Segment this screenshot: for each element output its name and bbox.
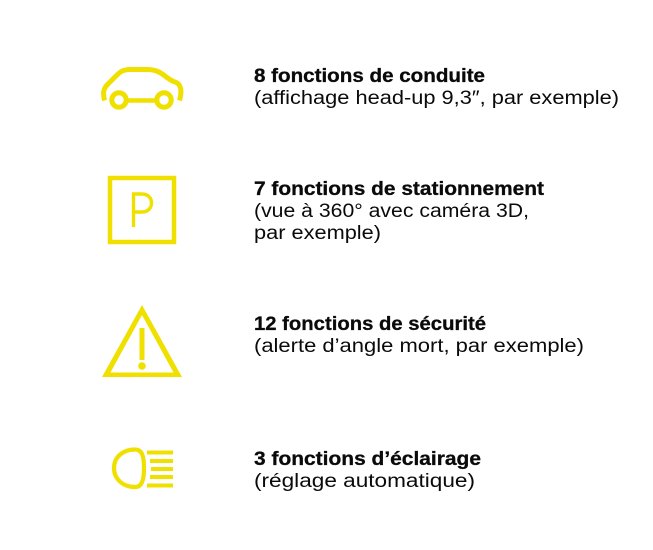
text: lighting functions: (réglage automatique) (254, 471, 475, 492)
text: driving functions: (affichage head-up 9,3″, par exemple) (254, 88, 619, 109)
text: parking functions: 7 fonctions de stationnement (254, 179, 545, 200)
icon: headlight (114, 450, 173, 487)
text: safety functions: 12 fonctions de sécurité (254, 314, 486, 335)
text: driving functions: 8 fonctions de conduite (254, 66, 485, 87)
text: parking functions: (vue à 360° avec caméra 3D, (254, 201, 529, 222)
text: driving functions (254, 66, 619, 109)
text: parking functions: par exemple) (254, 223, 381, 244)
text: lighting functions: 3 fonctions d’éclairage (254, 449, 481, 470)
text: parking functions (254, 179, 545, 244)
icon: parking (110, 178, 174, 242)
icon: car (104, 70, 181, 107)
text: safety functions (254, 314, 584, 357)
icon: warning triangle (102, 305, 182, 377)
text: safety functions: (alerte d’angle mort, par exemple) (254, 336, 584, 357)
text: lighting functions (254, 449, 481, 492)
